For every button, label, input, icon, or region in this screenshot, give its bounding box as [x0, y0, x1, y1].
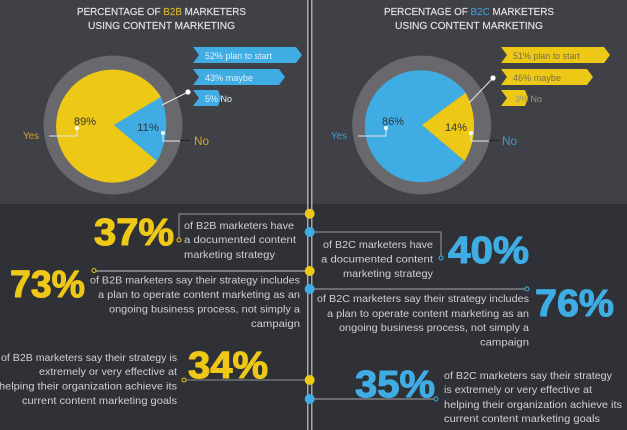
- stat: 35% B2C: of B2C marketers say their strategy: [444, 370, 613, 382]
- ribbon: 3% No: 3% No: [515, 94, 542, 105]
- label: Yes: Yes: [331, 130, 347, 142]
- stat: 34% B2B: 34%: [188, 345, 268, 387]
- stat: 35% B2C: current content marketing goals: [444, 413, 600, 425]
- pie chart: B2C: 14%: [445, 122, 467, 134]
- pie chart: B2B: 11%: [137, 122, 159, 134]
- connector lines: [96, 214, 525, 399]
- stat: 34% B2B: current content marketing goals: [22, 395, 177, 407]
- stat: 73% B2B: campaign: [251, 318, 300, 330]
- stat: 37% B2B: marketing strategy: [184, 249, 276, 261]
- background: top band: [0, 0, 627, 204]
- stat: 37% B2B: 37%: [94, 212, 174, 254]
- label: Yes: [331, 126, 388, 142]
- ribbon: 46% maybe: [501, 69, 593, 85]
- heading line two: B2B: USING CONTENT MARKETING: [88, 20, 235, 32]
- ribbon: 43% maybe: 43% maybe: [205, 73, 253, 84]
- stat: 35% B2C: 35%: [355, 364, 435, 406]
- ribbon: 43% maybe: [193, 69, 285, 85]
- background: bottom band: [0, 204, 627, 430]
- stat: 40% B2C: marketing strategy: [343, 268, 434, 280]
- stat: 34% B2B: helping their organization achieve its: [0, 380, 177, 392]
- stat: 73% B2B: ongoing business process, not simply a: [109, 304, 300, 316]
- ribbon: 5% No: 5% No: [205, 94, 232, 105]
- stat: 40% B2C: of B2C marketers have: [323, 239, 433, 251]
- stat: 35% B2C: [355, 364, 622, 425]
- ribbon: 52% plan to start: [193, 47, 302, 63]
- heading line two: B2C: USING CONTENT MARKETING: [395, 20, 543, 32]
- ribbon: 52% plan to start: 52% plan to start: [205, 51, 272, 62]
- ribbon: 51% plan to start: [501, 47, 610, 63]
- center timeline: [307, 0, 312, 430]
- ribbon: 46% maybe: 46% maybe: [513, 73, 561, 84]
- ribbon: 51% plan to start: 51% plan to start: [513, 51, 580, 62]
- leader line to ribbons: [162, 89, 191, 105]
- heading: B2C: PERCENTAGE OF B2C MARKETERS: [384, 6, 554, 18]
- timeline dots: [305, 209, 315, 404]
- stat: 40% B2C: [321, 230, 529, 280]
- pie chart: B2C: [352, 56, 491, 194]
- label: No: [469, 131, 517, 148]
- stat: 73% B2B: 73%: [10, 264, 85, 306]
- label: Yes: Yes: [23, 130, 39, 142]
- stat: 76% B2C: a plan to operate content marketing as an: [327, 308, 529, 320]
- label: No: [161, 131, 209, 148]
- stat: 34% B2B: extremely or very effective at: [39, 366, 177, 378]
- panel: B2B pie section: [23, 6, 302, 194]
- pie chart: B2B: 89%: [74, 116, 96, 128]
- leader line to ribbons: [469, 75, 496, 103]
- pie chart: B2C: 86%: [382, 116, 404, 128]
- pie chart: B2B: [44, 56, 182, 194]
- label: Yes: [23, 126, 79, 142]
- stat: 76% B2C: [317, 283, 614, 348]
- stat: 76% B2C: ongoing business process, not simply a: [339, 322, 529, 334]
- stat: 35% B2C: is extremely or very effective at: [444, 384, 592, 396]
- stat: 35% B2C: helping their organization achieve its: [444, 399, 622, 411]
- stat: 40% B2C: a documented content: [321, 254, 433, 266]
- stat: 40% B2C: 40%: [448, 230, 529, 272]
- ribbon: 5% No: [193, 90, 232, 106]
- stat: 37% B2B: of B2B marketers have: [184, 220, 294, 232]
- stat: 73% B2B: [10, 264, 300, 330]
- heading: B2B: PERCENTAGE OF B2B MARKETERS: [77, 6, 246, 18]
- label: No: No: [194, 136, 209, 148]
- stat: 37% B2B: a documented content: [184, 234, 296, 246]
- label: No: No: [502, 136, 517, 148]
- stat: 76% B2C: 76%: [535, 283, 614, 325]
- stat: 34% B2B: [0, 345, 268, 407]
- stat: 73% B2B: of B2B marketers say their strategy includes: [90, 274, 300, 286]
- panel: B2C pie section: [331, 6, 610, 194]
- connector end rings: [92, 238, 529, 401]
- stat: 34% B2B: of B2B marketers say their strategy is: [1, 352, 177, 364]
- ribbon: 3% No: [501, 90, 542, 106]
- stat: 76% B2C: of B2C marketers say their strategy includes: [317, 293, 529, 305]
- stat: 37% B2B: [94, 212, 296, 261]
- stat: 73% B2B: a plan to operate content marketing as an: [98, 289, 300, 301]
- stat: 76% B2C: campaign: [480, 336, 529, 348]
